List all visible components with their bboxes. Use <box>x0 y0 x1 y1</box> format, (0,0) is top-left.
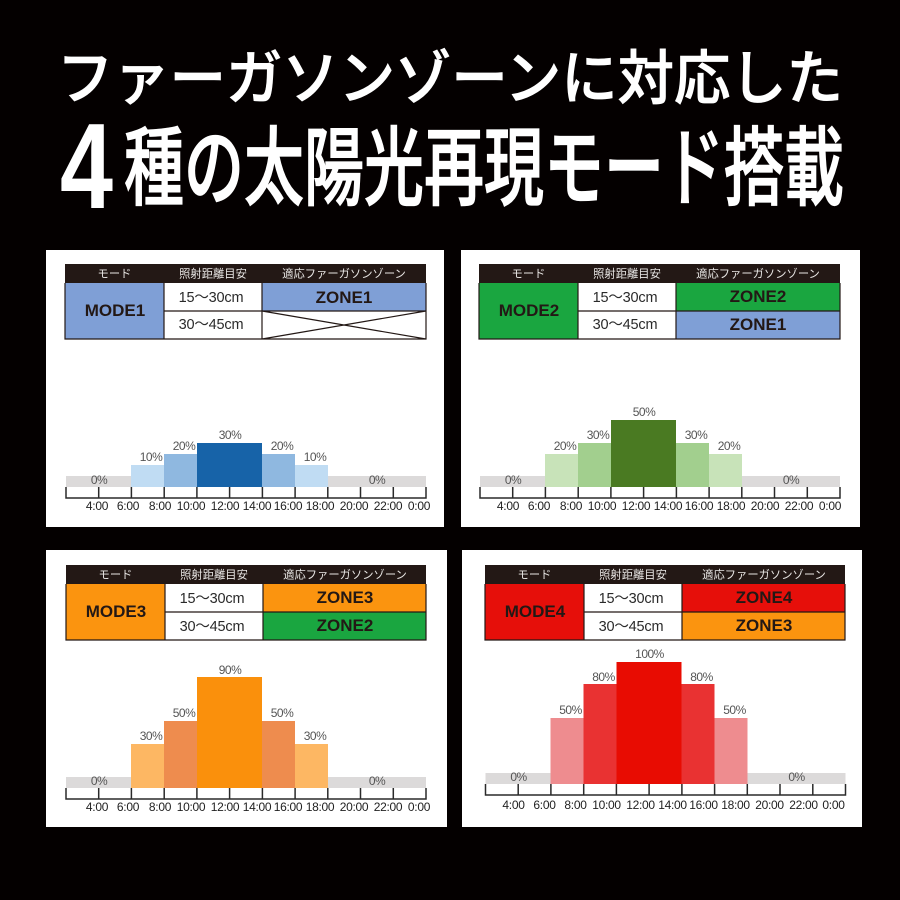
bar chart: mode 1: 10:00 <box>177 499 206 513</box>
table: mode 2: 適応ファーガソンゾーン <box>696 266 820 282</box>
table: mode 3: 30〜45cm <box>180 619 244 635</box>
table: mode 3: 15〜30cm <box>180 591 244 607</box>
bar chart: mode 4: 0:00 <box>822 798 845 812</box>
table: mode 4: MODE4 <box>505 602 566 621</box>
table: mode 4: モード <box>518 566 551 582</box>
bar chart: mode 1: 10% <box>304 450 327 464</box>
table: mode 3: 適応ファーガソンゾーン <box>283 566 407 582</box>
bar chart: mode 2: 50% <box>633 405 656 419</box>
table: mode 2 <box>479 264 840 339</box>
bar chart: mode 4: 20:00 <box>755 798 784 812</box>
table: mode 3: MODE3 <box>86 602 146 621</box>
bar chart: mode 3: 8:00 <box>149 800 172 814</box>
bar chart: mode 2: 12:00 <box>622 499 651 513</box>
bar chart: mode 3: 30% <box>140 729 163 743</box>
bar chart: mode 2: 6:00 <box>528 499 551 513</box>
table: mode 2: MODE2 <box>499 301 559 320</box>
bar chart: mode 1: 8:00 <box>149 499 172 513</box>
bar chart: mode 2: 14:00 <box>654 499 683 513</box>
bar chart: mode 1: 12:00 <box>211 499 240 513</box>
bar chart: mode 1 <box>66 428 431 513</box>
bar chart: mode 2: 30% <box>587 428 610 442</box>
table: mode 3: ZONE3 <box>317 588 373 607</box>
bar chart: mode 1: 16:00 <box>274 499 303 513</box>
bar chart: mode 3: 18:00 <box>306 800 335 814</box>
bar chart: mode 3: 22:00 <box>374 800 403 814</box>
panel: mode 4 <box>462 550 862 827</box>
bar chart: mode 4: 6:00 <box>533 798 556 812</box>
bar chart: mode 4: 80% <box>592 670 616 684</box>
bar chart: mode 3: 20:00 <box>340 800 369 814</box>
bar chart: mode 4: 16:00 <box>689 798 718 812</box>
table: mode 4: ZONE3 <box>736 616 792 635</box>
table: mode 2: ZONE1 <box>730 315 786 334</box>
table: mode 4: ZONE4 <box>736 588 793 607</box>
bar chart: mode 2: 0% <box>783 473 800 487</box>
panel: mode 1 <box>46 250 444 527</box>
table: mode 4: 適応ファーガソンゾーン <box>702 566 826 582</box>
bar chart: mode 3: 6:00 <box>117 800 140 814</box>
bar chart: mode 3: 50% <box>271 706 294 720</box>
title: ファーガソンゾーンに対応した <box>57 31 843 116</box>
table: mode 1: 照射距離目安 <box>179 266 247 282</box>
bar chart: mode 3: 10:00 <box>177 800 206 814</box>
table: mode 3: モード <box>99 566 132 582</box>
table: mode 4: 30〜45cm <box>599 619 663 635</box>
bar chart: mode 3: 50% <box>173 706 196 720</box>
bar chart: mode 3: 90% <box>219 663 242 677</box>
table: mode 1: モード <box>98 266 131 282</box>
bar chart: mode 2: 20% <box>554 439 577 453</box>
table: mode 1: MODE1 <box>85 301 145 320</box>
table: mode 2: 照射距離目安 <box>593 266 661 282</box>
table: mode 2: 30〜45cm <box>593 317 657 333</box>
table: mode 3: ZONE2 <box>317 616 373 635</box>
panel: mode 2 <box>461 250 860 527</box>
bar chart: mode 2: 18:00 <box>717 499 746 513</box>
bar chart: mode 4: 4:00 <box>502 798 525 812</box>
bar chart: mode 1: 18:00 <box>306 499 335 513</box>
bar chart: mode 4: 50% <box>723 703 747 717</box>
bar chart: mode 2: 0% <box>505 473 522 487</box>
table: mode 4: 15〜30cm <box>599 591 663 607</box>
bar chart: mode 4: 22:00 <box>789 798 818 812</box>
bar chart: mode 3: 4:00 <box>86 800 109 814</box>
bar chart: mode 4: 0% <box>510 770 528 784</box>
bar chart: mode 1: 20:00 <box>340 499 369 513</box>
bar chart: mode 1: 4:00 <box>86 499 109 513</box>
bar chart: mode 1: 30% <box>219 428 242 442</box>
bar chart: mode 2: 8:00 <box>560 499 583 513</box>
bar chart: mode 1: 20% <box>173 439 196 453</box>
table: mode 2: 15〜30cm <box>593 290 657 306</box>
bar chart: mode 2: 20:00 <box>751 499 780 513</box>
bar chart: mode 1: 6:00 <box>117 499 140 513</box>
panel: mode 3 <box>46 550 447 827</box>
table: mode 1: 適応ファーガソンゾーン <box>282 266 406 282</box>
bar chart: mode 3: 12:00 <box>211 800 240 814</box>
bar chart: mode 2: 30% <box>685 428 708 442</box>
bar chart: mode 4: 50% <box>559 703 583 717</box>
bar chart: mode 2: 22:00 <box>785 499 814 513</box>
bar chart: mode 4: 80% <box>690 670 714 684</box>
bar chart: mode 4: 10:00 <box>592 798 621 812</box>
table: mode 2: ZONE2 <box>730 287 786 306</box>
bar chart: mode 2: 16:00 <box>685 499 714 513</box>
bar chart: mode 1: 0% <box>369 473 386 487</box>
bar chart: mode 4: 18:00 <box>721 798 750 812</box>
bar chart: mode 4: 14:00 <box>658 798 687 812</box>
bar chart: mode 4: 100% <box>635 647 665 661</box>
table: mode 2: モード <box>512 266 545 282</box>
table: mode 1: 15〜30cm <box>179 290 243 306</box>
bar chart: mode 3: 0% <box>369 774 386 788</box>
bar chart: mode 2 <box>480 405 842 513</box>
table: mode 4 <box>485 565 845 640</box>
table: mode 1: 30〜45cm <box>179 317 243 333</box>
bar chart: mode 3 <box>66 663 431 814</box>
bar chart: mode 3: 0% <box>91 774 108 788</box>
bar chart: mode 1: 22:00 <box>374 499 403 513</box>
bar chart: mode 4 <box>486 647 846 812</box>
bar chart: mode 2: 0:00 <box>819 499 842 513</box>
bar chart: mode 1: 0% <box>91 473 108 487</box>
bar chart: mode 3: 30% <box>304 729 327 743</box>
bar chart: mode 3: 16:00 <box>274 800 303 814</box>
bar chart: mode 2: 10:00 <box>588 499 617 513</box>
bar chart: mode 2: 4:00 <box>497 499 520 513</box>
bar chart: mode 4: 0% <box>788 770 806 784</box>
title: 4 <box>60 98 113 234</box>
bar chart: mode 1: 14:00 <box>243 499 272 513</box>
table: mode 1 <box>65 264 426 339</box>
title <box>57 31 844 234</box>
bar chart: mode 3: 0:00 <box>408 800 431 814</box>
bar chart: mode 1: 20% <box>271 439 294 453</box>
table: mode 3: 照射距離目安 <box>180 566 248 582</box>
bar chart: mode 1: 0:00 <box>408 499 431 513</box>
bar chart: mode 4: 12:00 <box>626 798 655 812</box>
bar chart: mode 2: 20% <box>718 439 741 453</box>
table: mode 1: ZONE1 <box>316 288 372 307</box>
table: mode 4: 照射距離目安 <box>599 566 667 582</box>
bar chart: mode 1: 10% <box>140 450 163 464</box>
bar chart: mode 3: 14:00 <box>243 800 272 814</box>
bar chart: mode 4: 8:00 <box>564 798 587 812</box>
table: mode 3 <box>66 565 426 640</box>
